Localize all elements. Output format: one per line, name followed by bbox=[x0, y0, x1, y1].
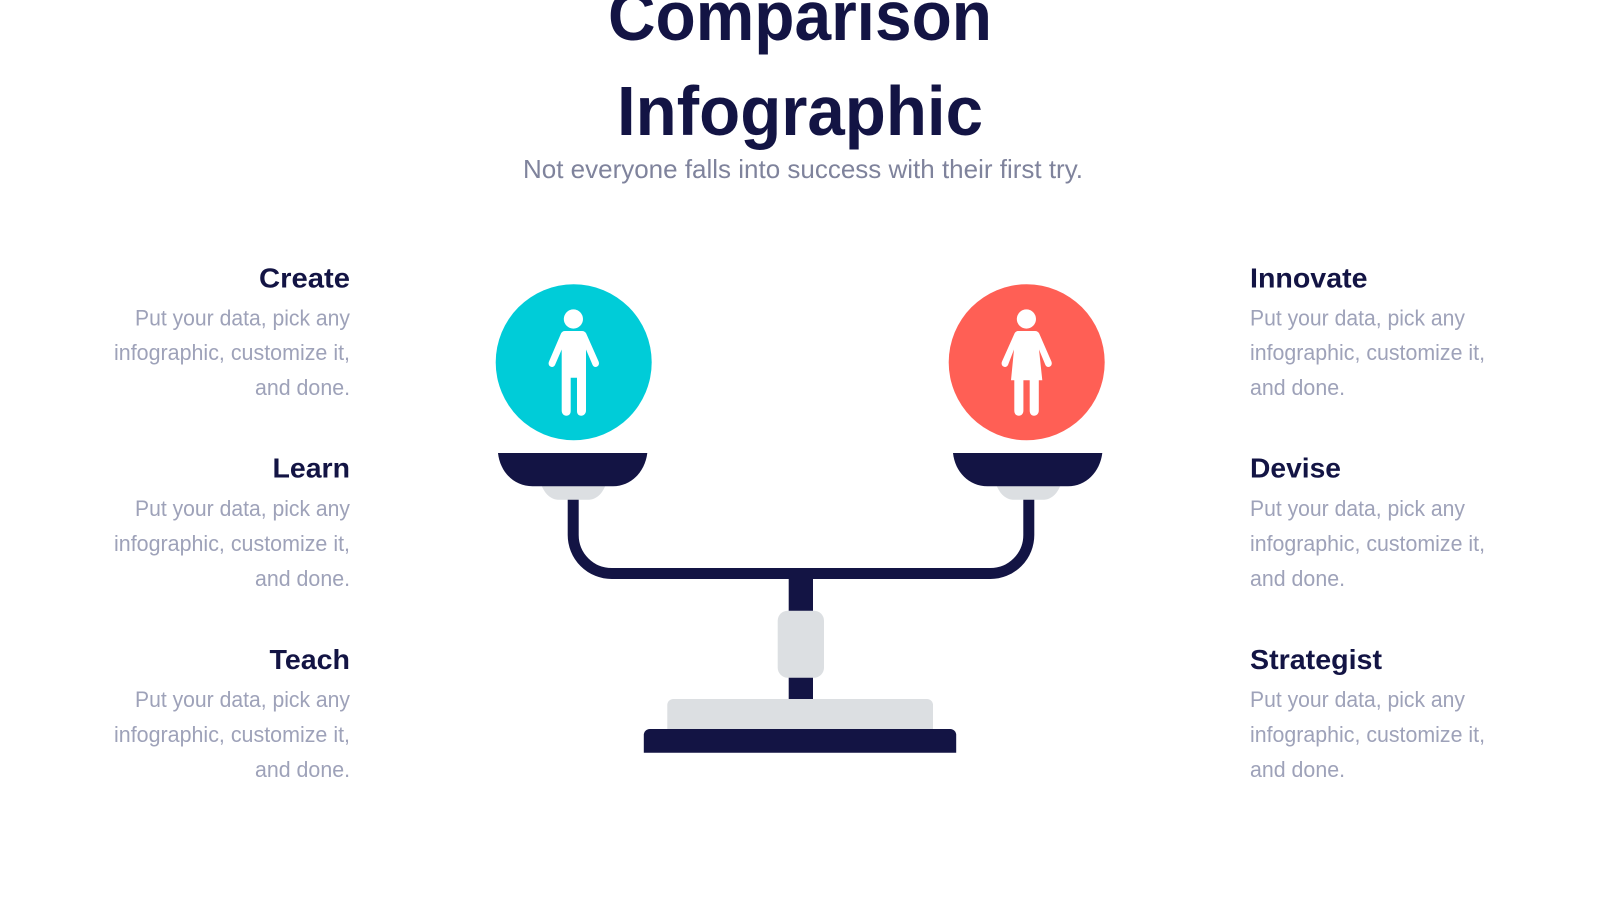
text block: Innovate: infographic, customize it, bbox=[1250, 340, 1485, 365]
right pan bbox=[953, 453, 1102, 486]
text block: Learn: infographic, customize it, bbox=[114, 531, 350, 556]
text block: Learn: and done. bbox=[255, 566, 350, 591]
text block: Learn: Learn bbox=[272, 452, 350, 484]
text block: Create: infographic, customize it, bbox=[114, 340, 350, 365]
text block: Teach: Put your data, pick any bbox=[135, 687, 350, 712]
text block: Teach: infographic, customize it, bbox=[114, 722, 350, 747]
text block: Create: Create bbox=[259, 262, 350, 294]
column joint bbox=[778, 611, 824, 678]
text block: Strategist: Strategist bbox=[1250, 644, 1382, 675]
text block: Devise: Put your data, pick any bbox=[1250, 496, 1465, 521]
text block: Innovate: Put your data, pick any bbox=[1250, 306, 1465, 330]
text block: Strategist: and done. bbox=[1250, 757, 1345, 782]
upper base bbox=[667, 699, 933, 732]
text block: Strategist bbox=[1250, 644, 1485, 782]
text block: Teach bbox=[114, 644, 350, 782]
left pan bbox=[498, 453, 647, 486]
text block: Strategist: infographic, customize it, bbox=[1250, 722, 1485, 747]
text block: Create: Put your data, pick any bbox=[135, 306, 350, 330]
scale arm bbox=[573, 495, 1029, 574]
text block: Create: and done. bbox=[255, 375, 350, 400]
icon: woman in coral circle bbox=[949, 284, 1105, 440]
text block: Devise: and done. bbox=[1250, 566, 1345, 591]
right pan holder bbox=[996, 484, 1061, 500]
text block: Learn: Put your data, pick any bbox=[135, 496, 350, 521]
left pan holder bbox=[541, 484, 606, 500]
text block: Devise: infographic, customize it, bbox=[1250, 531, 1485, 556]
title: Infographic bbox=[617, 72, 983, 150]
icon: man in teal circle bbox=[496, 284, 652, 440]
text block: Devise: Devise bbox=[1250, 452, 1341, 484]
scale column bbox=[789, 570, 813, 700]
text block: Create bbox=[114, 262, 350, 400]
text block: Teach: and done. bbox=[255, 757, 350, 782]
text block: Innovate: and done. bbox=[1250, 375, 1345, 400]
text block: Devise bbox=[1250, 452, 1485, 591]
subtitle: Not everyone falls into success with their first try. bbox=[523, 154, 1083, 184]
lower base bbox=[644, 729, 956, 753]
text block: Learn bbox=[114, 452, 350, 591]
text block: Teach: Teach bbox=[270, 644, 350, 675]
title bbox=[608, 0, 992, 150]
text block: Innovate: Innovate bbox=[1250, 262, 1368, 294]
text block: Strategist: Put your data, pick any bbox=[1250, 687, 1465, 712]
balance scale bbox=[498, 453, 1102, 753]
text block: Innovate bbox=[1250, 262, 1485, 400]
